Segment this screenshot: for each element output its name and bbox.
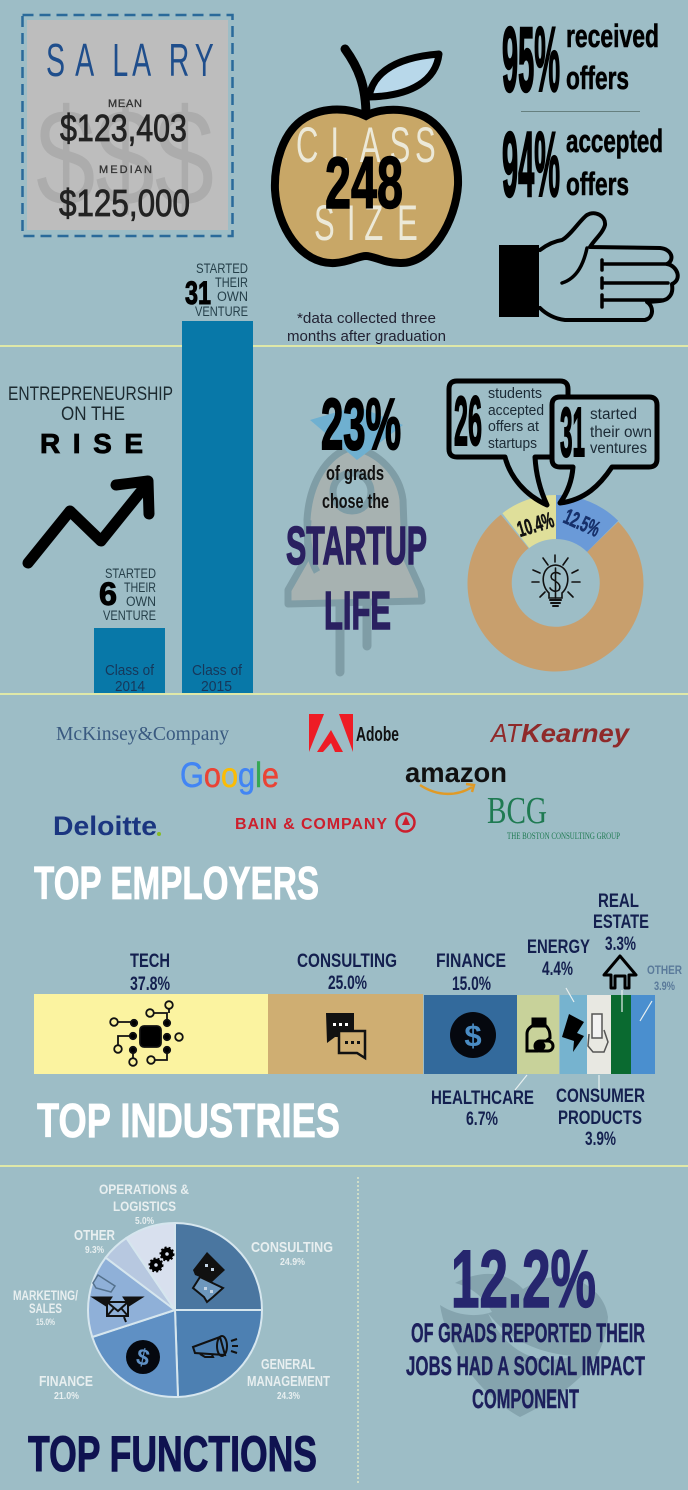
label: class of 2015: Class of (192, 663, 243, 679)
panel: top employers logos (34, 714, 631, 909)
icon: chat bubbles (326, 1013, 365, 1058)
panel: offers (499, 9, 678, 320)
text: social impact statement: COMPONENT (472, 1384, 579, 1414)
label: general management: MANAGEMENT (247, 1374, 330, 1390)
label: general management (247, 1357, 330, 1402)
slice: other (106, 1238, 175, 1310)
text: class: CLASS (296, 116, 436, 173)
label: healthcare: HEALTHCARE (431, 1088, 534, 1109)
label: tech: 37.8% (130, 974, 170, 995)
label: operations and logistics: LOGISTICS (113, 1198, 176, 1214)
icon: medicine bottle (527, 1019, 553, 1051)
panel: entrepreneurship heading (8, 384, 173, 459)
label: real estate: 3.3% (605, 934, 636, 955)
label: healthcare (431, 1088, 534, 1130)
icon: rising arrow (28, 481, 149, 563)
label: operations and logistics: 5.0% (135, 1216, 154, 1227)
label: class of 2014 (105, 663, 155, 695)
callout: 31 ventures: 31 (560, 393, 585, 471)
logo: BCG: THE BOSTON CONSULTING GROUP (507, 831, 620, 841)
logo: BCG (487, 790, 620, 841)
slice: operations and logistics (126, 1223, 175, 1310)
icon: light bulb (532, 555, 580, 606)
watermark: dollar signs: $$$ (36, 81, 214, 235)
logo: Amazon: amazon (405, 757, 507, 788)
icon: lightning bolt (562, 1014, 584, 1052)
label: 31 ventures: VENTURE (195, 304, 248, 319)
heading: top employers: TOP EMPLOYERS (34, 857, 319, 909)
panel: entrepreneurship heading: ON THE (61, 404, 125, 425)
panel: startup life (286, 385, 427, 672)
label: other (647, 963, 682, 993)
stat: 12.2 percent: 12.2% (451, 1234, 596, 1325)
label: finance: FINANCE (39, 1373, 93, 1390)
logo: AT Kearney: Kearney (521, 718, 631, 748)
icon: apple leaf (369, 54, 439, 97)
icon: apple body (275, 110, 458, 263)
donut: rest (467, 515, 643, 672)
label: energy: 4.4% (542, 959, 573, 980)
footnote: *data collected three (297, 310, 436, 327)
label: energy (527, 937, 590, 980)
panel: offers: 94% (502, 114, 560, 216)
label: consulting (297, 951, 397, 994)
label: 6 ventures: 6 (99, 576, 117, 612)
logo: Adobe (309, 714, 399, 752)
label: consulting: CONSULTING (297, 951, 397, 972)
label: other (74, 1227, 115, 1256)
chart: top functions pie (88, 1223, 262, 1397)
value: median salary: $125,000 (59, 183, 190, 225)
label: general management: 24.3% (277, 1391, 300, 1402)
icon: dollar coin (450, 1012, 496, 1058)
label: consulting: 25.0% (328, 973, 367, 994)
label: consumer products: 3.9% (585, 1129, 616, 1150)
label: finance: 15.0% (452, 974, 491, 995)
label: 6 ventures: VENTURE (103, 608, 156, 623)
label: consumer products: CONSUMER (556, 1086, 645, 1107)
label: healthcare: 6.7% (466, 1109, 498, 1130)
chart: startup donut (449, 381, 657, 672)
label: real estate: REAL (598, 891, 639, 912)
watermark: heart leaf (440, 1274, 608, 1417)
label: median: MEDIAN (99, 164, 152, 176)
label: mean: MEAN (108, 98, 142, 110)
slice: consulting (175, 1223, 262, 1310)
label: consulting (251, 1239, 333, 1268)
slice: marketing and sales (88, 1258, 175, 1337)
text: offers: offers (566, 60, 629, 96)
label: 31 ventures: STARTED (196, 261, 248, 276)
label: marketing and sales: MARKETING/ (13, 1288, 78, 1303)
logo: Bain: BAIN & COMPANY (235, 816, 387, 833)
segment: tech (34, 994, 268, 1074)
logo: Adobe: Adobe (356, 724, 399, 746)
stat: 23 percent: 23% (321, 385, 401, 465)
label: real estate: ESTATE (593, 912, 649, 933)
label: class of 2015 (192, 663, 243, 695)
logo: Deloitte: Deloitte (53, 811, 157, 841)
label: consulting: 24.9% (280, 1257, 305, 1268)
icon: tilted chat bubbles (193, 1252, 225, 1302)
label: consumer products (556, 1086, 645, 1150)
panel: social impact (406, 1234, 645, 1417)
callout: 26 students (449, 381, 568, 505)
value: mean salary: $123,403 (60, 108, 187, 150)
label: real estate (593, 891, 649, 955)
bar: class of 2014 (94, 628, 165, 693)
callout: 26 students: 26 (454, 382, 482, 460)
label: class of 2015: 2015 (201, 679, 232, 695)
chart: top industries bar (34, 891, 682, 1150)
label: 6 ventures: STARTED (105, 566, 156, 581)
segment: real estate (611, 995, 631, 1074)
text: of grads: of grads (326, 463, 384, 485)
label: other: OTHER (74, 1227, 115, 1244)
callout: 31 ventures: ventures (590, 440, 647, 457)
text: life: LIFE (324, 581, 391, 641)
callout: 26 students: startups (488, 436, 537, 452)
logo: AT Kearney: AT (489, 718, 523, 748)
icon: open hand (499, 213, 678, 320)
segment: consulting (268, 994, 423, 1074)
label: consulting: CONSULTING (251, 1239, 333, 1256)
icon: house (604, 956, 636, 988)
logo: BCG: BCG (487, 790, 547, 832)
label: finance: 21.0% (54, 1391, 79, 1402)
heading: top industries: TOP INDUSTRIES (37, 1095, 340, 1148)
logo: Google: Google (180, 756, 279, 795)
label: general management: GENERAL (261, 1357, 315, 1373)
panel: class size apple (275, 49, 458, 263)
slice: finance (92, 1310, 178, 1397)
icon: dollar coin: $ (134, 1343, 152, 1371)
value: class size: 248 (325, 143, 403, 224)
panel: offers: 95% (502, 9, 560, 111)
slice: general management (175, 1310, 262, 1397)
label: 31 ventures (185, 261, 248, 319)
label: 6 ventures: THEIR (124, 580, 156, 595)
label: marketing and sales (13, 1288, 78, 1328)
label: tech (130, 951, 170, 995)
panel: salary (22, 15, 232, 236)
heading: top functions: TOP FUNCTIONS (28, 1426, 317, 1482)
callout: 26 students: offers at (488, 419, 539, 435)
logo: McKinsey: McKinsey&Company (56, 723, 229, 745)
label: marketing and sales: 15.0% (36, 1317, 55, 1328)
chart: class bar chart (94, 261, 253, 695)
label: tech: TECH (130, 951, 170, 972)
segment: consumer products (587, 995, 611, 1074)
panel: entrepreneurship heading: ENTREPRENEURSHIP (8, 384, 173, 405)
segment: finance (424, 995, 517, 1074)
segment: healthcare (517, 995, 559, 1074)
text: chose the: chose the (322, 491, 389, 513)
text: social impact statement (406, 1318, 645, 1414)
label: marketing and sales: SALES (29, 1301, 62, 1316)
label: 12.5 percent: 12.5% (560, 504, 604, 542)
label: 6 ventures: OWN (126, 594, 156, 609)
callout: 31 ventures: started (590, 406, 637, 423)
segment: other (631, 995, 655, 1074)
label: finance (436, 951, 506, 995)
icon: dollar coin: $ (464, 1018, 482, 1053)
label: consumer products: PRODUCTS (558, 1108, 642, 1129)
label: 10.4 percent: 10.4% (514, 507, 557, 542)
callout: 26 students: accepted (488, 403, 544, 419)
text: startup: STARTUP (286, 516, 427, 576)
icon: winged envelope (92, 1275, 143, 1322)
label: energy: ENERGY (527, 937, 590, 958)
icon: megaphone (193, 1336, 238, 1357)
heading: salary: SALARY (46, 35, 214, 87)
donut: started ventures (556, 495, 618, 552)
label: operations and logistics (99, 1181, 189, 1227)
labels: functions (13, 1181, 333, 1402)
label: other: 3.9% (654, 979, 675, 993)
panel: entrepreneurship heading: RISE (40, 428, 143, 459)
callout: 31 ventures (552, 393, 657, 503)
label: class of 2014: Class of (105, 663, 155, 679)
watermark: rocket (288, 406, 422, 672)
text: size: SIZE (314, 194, 418, 251)
label: 6 ventures (99, 566, 156, 623)
footnote (287, 310, 446, 345)
icon: circuit chip (110, 1001, 183, 1066)
text: offers: offers (566, 166, 629, 202)
icon: hand with card (588, 1014, 608, 1052)
donut: accepted offers at startups (502, 495, 556, 548)
label: other: OTHER (647, 963, 682, 977)
callout: 26 students: students (488, 386, 542, 402)
segment: energy (560, 995, 587, 1074)
label: operations and logistics: OPERATIONS & (99, 1181, 189, 1197)
label: other: 9.3% (85, 1245, 104, 1256)
label: 31 ventures: 31 (185, 275, 211, 311)
icon: apple stem (345, 49, 366, 116)
callout: 31 ventures: their own (590, 424, 652, 441)
icon: gears (150, 1248, 174, 1272)
label: 31 ventures: OWN (217, 289, 248, 304)
footnote: months after graduation (287, 328, 446, 345)
bar: class of 2015 (182, 321, 253, 693)
icon: dollar coin (126, 1340, 160, 1374)
label: finance (39, 1373, 93, 1402)
label: 31 ventures: THEIR (215, 275, 248, 290)
label: class of 2014: 2014 (115, 679, 145, 695)
label: finance: FINANCE (436, 951, 506, 972)
